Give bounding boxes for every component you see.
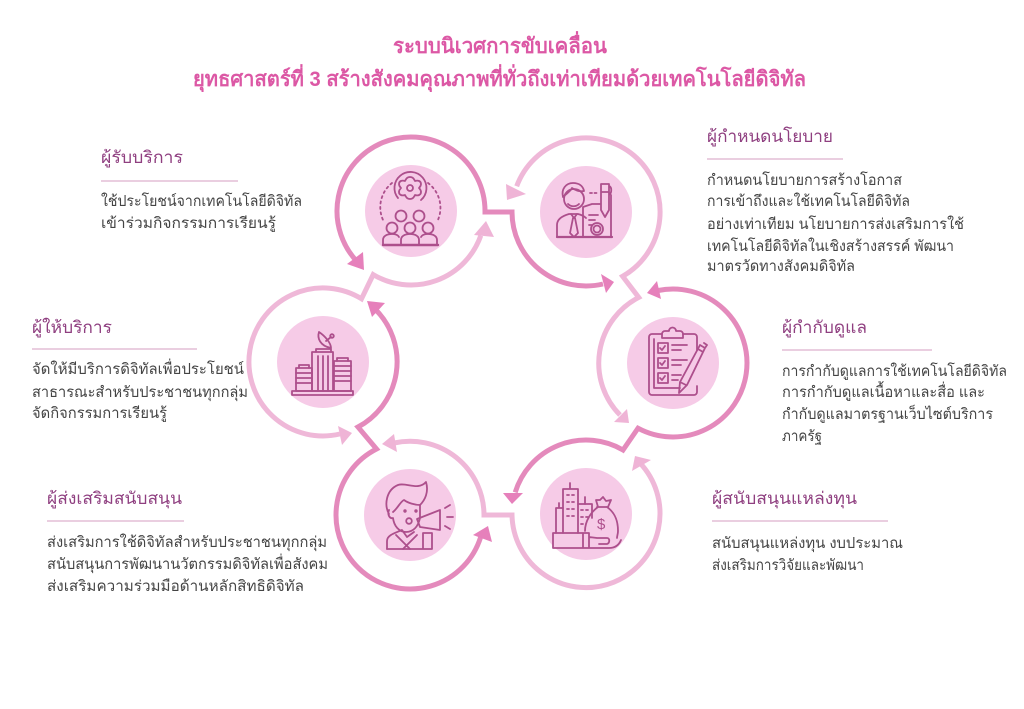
panel: regulators: ภาครัฐ	[782, 428, 822, 445]
panel: policy makers: มาตรวัดทางสังคมดิจิทัล	[707, 258, 855, 275]
icon: buildings with money bag	[540, 468, 632, 560]
arrow: dark bottom-left ring to left ring	[336, 301, 492, 589]
panel: policy makers	[707, 126, 964, 275]
panel: regulators	[782, 318, 1007, 445]
panel: regulators: ผู้กำกับดูแล	[782, 318, 867, 338]
panel: promoters and supporters: ส่งเสริมความร่วมมือด้านหลักสิทธิดิจิทัล	[47, 578, 304, 595]
panel: regulators: การกำกับดูแลเนื้อหาและสื่อ และ	[782, 381, 985, 401]
title: ระบบนิเวศการขับเคลื่อน	[393, 30, 608, 58]
icon: community with gear	[365, 165, 457, 257]
panel: service providers: จัดกิจกรรมการเรียนรู้	[32, 405, 167, 422]
panel: funding supporters: ผู้สนับสนุนแหล่งทุน	[712, 489, 857, 509]
panel: promoters and supporters: สนับสนุนการพัฒนานวัตกรรมดิจิทัลเพื่อสังคม	[47, 553, 328, 574]
panel: policy makers: ผู้กำหนดนโยบาย	[707, 126, 833, 147]
title: ยุทธศาสตร์ที่ 3 สร้างสังคมคุณภาพที่ทั่วถึงเท่าเทียมด้วยเทคโนโลยีดิจิทัล	[193, 63, 806, 93]
panel: promoters and supporters: ผู้ส่งเสริมสนับสนุน	[47, 489, 182, 509]
panel: service recipients: ผู้รับบริการ	[101, 148, 183, 168]
panel: service recipients: ใช้ประโยชน์จากเทคโนโลยีดิจิทัล	[101, 192, 302, 210]
panel: promoters and supporters	[47, 489, 328, 595]
icon: clipboard checklist	[627, 317, 719, 409]
panel: funding supporters: ส่งเสริมการวิจัยและพัฒนา	[712, 557, 864, 574]
icon: policy maker with document	[540, 166, 632, 258]
icon: buildings with money bag: $	[597, 516, 606, 533]
arrow: dark top S-curve	[337, 137, 614, 293]
panel: regulators: กำกับดูแลมาตรฐานเว็บไซต์บริการ	[782, 404, 993, 423]
icon: person with megaphone	[364, 469, 456, 561]
arrow: dark right ring to bottom-right ring	[503, 281, 747, 504]
cycle ring diagram	[249, 137, 747, 589]
panel: service providers	[32, 317, 248, 422]
arrow: light top-right ring to right ring	[506, 138, 660, 423]
panel: service providers: จัดให้มีบริการดิจิทัลเพื่อประโยชน์	[32, 358, 244, 378]
panel: service providers: สาธารณะสำหรับประชาชนทุกกลุ่ม	[32, 384, 248, 402]
panel: policy makers: การเข้าถึงและใช้เทคโนโลยีดิจิทัล	[707, 192, 910, 210]
panel: policy makers: กำหนดนโยบายการสร้างโอกาส	[707, 171, 902, 189]
panel: promoters and supporters: ส่งเสริมการใช้ดิจิทัลสำหรับประชาชนทุกกลุ่ม	[47, 533, 327, 552]
panel: service recipients	[101, 148, 302, 232]
arrow: light bottom S-curve	[382, 434, 660, 588]
panel: regulators: การกำกับดูแลการใช้เทคโนโลยีดิจิทัล	[782, 362, 1007, 380]
panel: service recipients: เข้าร่วมกิจกรรมการเรียนรู้	[101, 215, 276, 232]
panel: policy makers: เทคโนโลยีดิจิทัลในเชิงสร้างสรรค์ พัฒนา	[707, 237, 954, 255]
icon: buildings with satellite dish	[277, 316, 369, 408]
panel: service providers: ผู้ให้บริการ	[32, 317, 112, 338]
panel: policy makers: อย่างเท่าเทียม นโยบายการส่งเสริมการใช้	[707, 215, 964, 233]
title	[193, 30, 806, 93]
panel: funding supporters: สนับสนุนแหล่งทุน งบประมาณ	[712, 535, 903, 553]
panel: funding supporters	[712, 489, 903, 574]
arrow: light left ring to top-left ring	[249, 221, 494, 445]
